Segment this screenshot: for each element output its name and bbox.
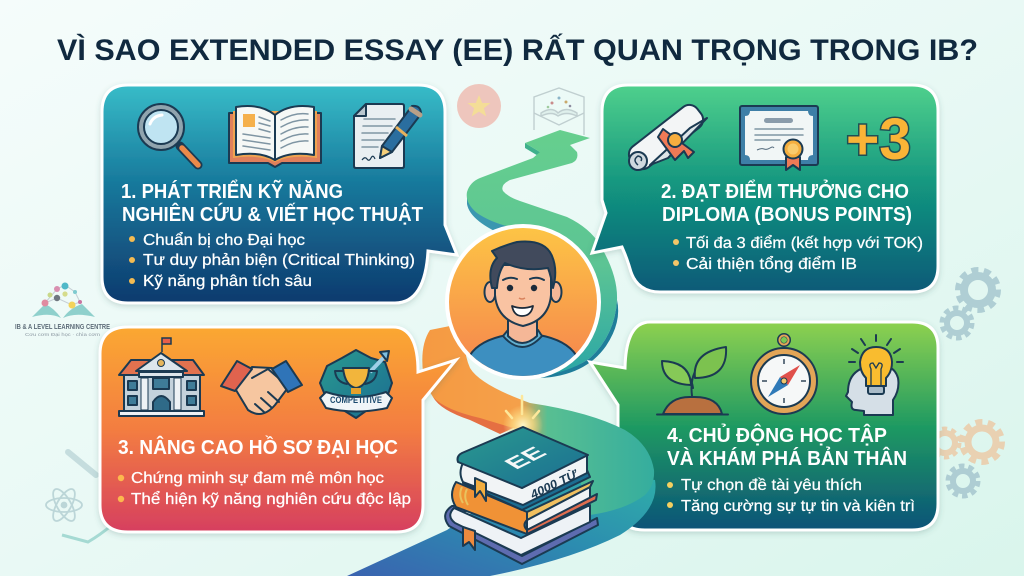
- heading 4: 4. CHỦ ĐỘNG HỌC TẬP: [667, 423, 887, 447]
- portrait circle: [447, 226, 599, 378]
- panel 2: diploma bonus points: [592, 85, 938, 292]
- icon: magnifying glass: [138, 104, 198, 165]
- book stack with EE label: [445, 396, 598, 564]
- bottom book: [445, 505, 598, 564]
- bullet list 4: [667, 477, 915, 515]
- top book: EE: [499, 444, 553, 473]
- logo: IB & A Level Learning Centre: [15, 282, 110, 337]
- bullet list 2: Tối đa 3 điểm (kết hợp với TOK): [686, 234, 923, 252]
- bullet list 1: Chuẩn bị cho Đại học: [143, 231, 305, 249]
- logo: IB & A Level Learning Centre: IB & A LEVEL LEARNING CENTRE: [15, 324, 110, 331]
- bullet list 1: Tư duy phản biện (Critical Thinking): [143, 252, 415, 269]
- winding path: upper section: [467, 130, 618, 378]
- panel 1: research and academic writing: [102, 85, 457, 303]
- character portrait: [447, 226, 599, 385]
- heading 2: 2. ĐẠT ĐIỂM THƯỞNG CHO: [661, 179, 909, 203]
- heading 1: [121, 180, 423, 226]
- icon: seedling: [657, 347, 728, 414]
- heading 4: VÀ KHÁM PHÁ BẢN THÂN: [667, 446, 907, 470]
- decorative icon: destination banner with book: [534, 88, 584, 135]
- panel 4: active learning and self discovery: [590, 322, 938, 530]
- icon: diploma scroll: [625, 101, 707, 173]
- bullet list 4: Tăng cường sự tự tin và kiên trì: [681, 498, 915, 515]
- bullet list 1: Kỹ năng phân tích sâu: [143, 273, 312, 290]
- heading 4: [667, 423, 907, 470]
- bullet list 3: Chứng minh sự đam mê môn học: [131, 470, 384, 487]
- top book: 4000 TỪ: [527, 465, 581, 502]
- bullet list 3: [118, 470, 411, 508]
- speech bubble 2: [592, 85, 938, 292]
- bullet list 3: Thể hiện kỹ năng nghiên cứu độc lập: [131, 490, 411, 508]
- icon: plus three: +3: [846, 107, 911, 172]
- bullet list 4: Tự chọn đề tài yêu thích: [681, 477, 862, 494]
- heading 2: [661, 179, 912, 226]
- icon: competitive badge: [320, 350, 392, 418]
- icon: open book: [229, 106, 321, 167]
- middle book: [452, 481, 597, 534]
- heading 2: DIPLOMA (BONUS POINTS): [662, 204, 912, 226]
- decorative science icons left: [46, 452, 112, 542]
- speech bubble 4: [590, 322, 938, 530]
- heading 1: NGHIÊN CỨU & VIẾT HỌC THUẬT: [122, 202, 423, 226]
- decorative icon: Vietnam flag circle: [457, 84, 501, 128]
- logo: IB & A Level Learning Centre: Cơu cơm Đại học · chìa cơm: [25, 332, 100, 337]
- decorative gears right: [931, 270, 1002, 496]
- icon: university building: [119, 338, 204, 416]
- icon: document and pen: [354, 104, 421, 168]
- title: VÌ SAO EXTENDED ESSAY (EE) RẤT QUAN TRỌNG TRONG IB?: [57, 33, 978, 67]
- heading 3: 3. NÂNG CAO HỒ SƠ ĐẠI HỌC: [118, 435, 398, 459]
- icon: handshake: [221, 361, 302, 414]
- icon: certificate: [740, 106, 818, 170]
- icon: competitive badge: COMPETITIVE: [330, 395, 382, 405]
- speech bubble 1: [102, 85, 457, 303]
- icon: compass: [751, 335, 817, 414]
- bullet list 1: [129, 231, 415, 290]
- top book: [458, 427, 590, 510]
- glow and rays: [503, 396, 543, 445]
- icon: head with lightbulb: [846, 335, 903, 415]
- heading 1: 1. PHÁT TRIỂN KỸ NĂNG: [121, 180, 343, 203]
- bullet list 2: [673, 234, 923, 273]
- person: [470, 240, 576, 376]
- winding path: lower section: [347, 322, 656, 576]
- speech bubble 3: [100, 327, 456, 532]
- bullet list 2: Cải thiện tổng điểm IB: [686, 255, 857, 273]
- panel 3: university profile: [100, 327, 456, 532]
